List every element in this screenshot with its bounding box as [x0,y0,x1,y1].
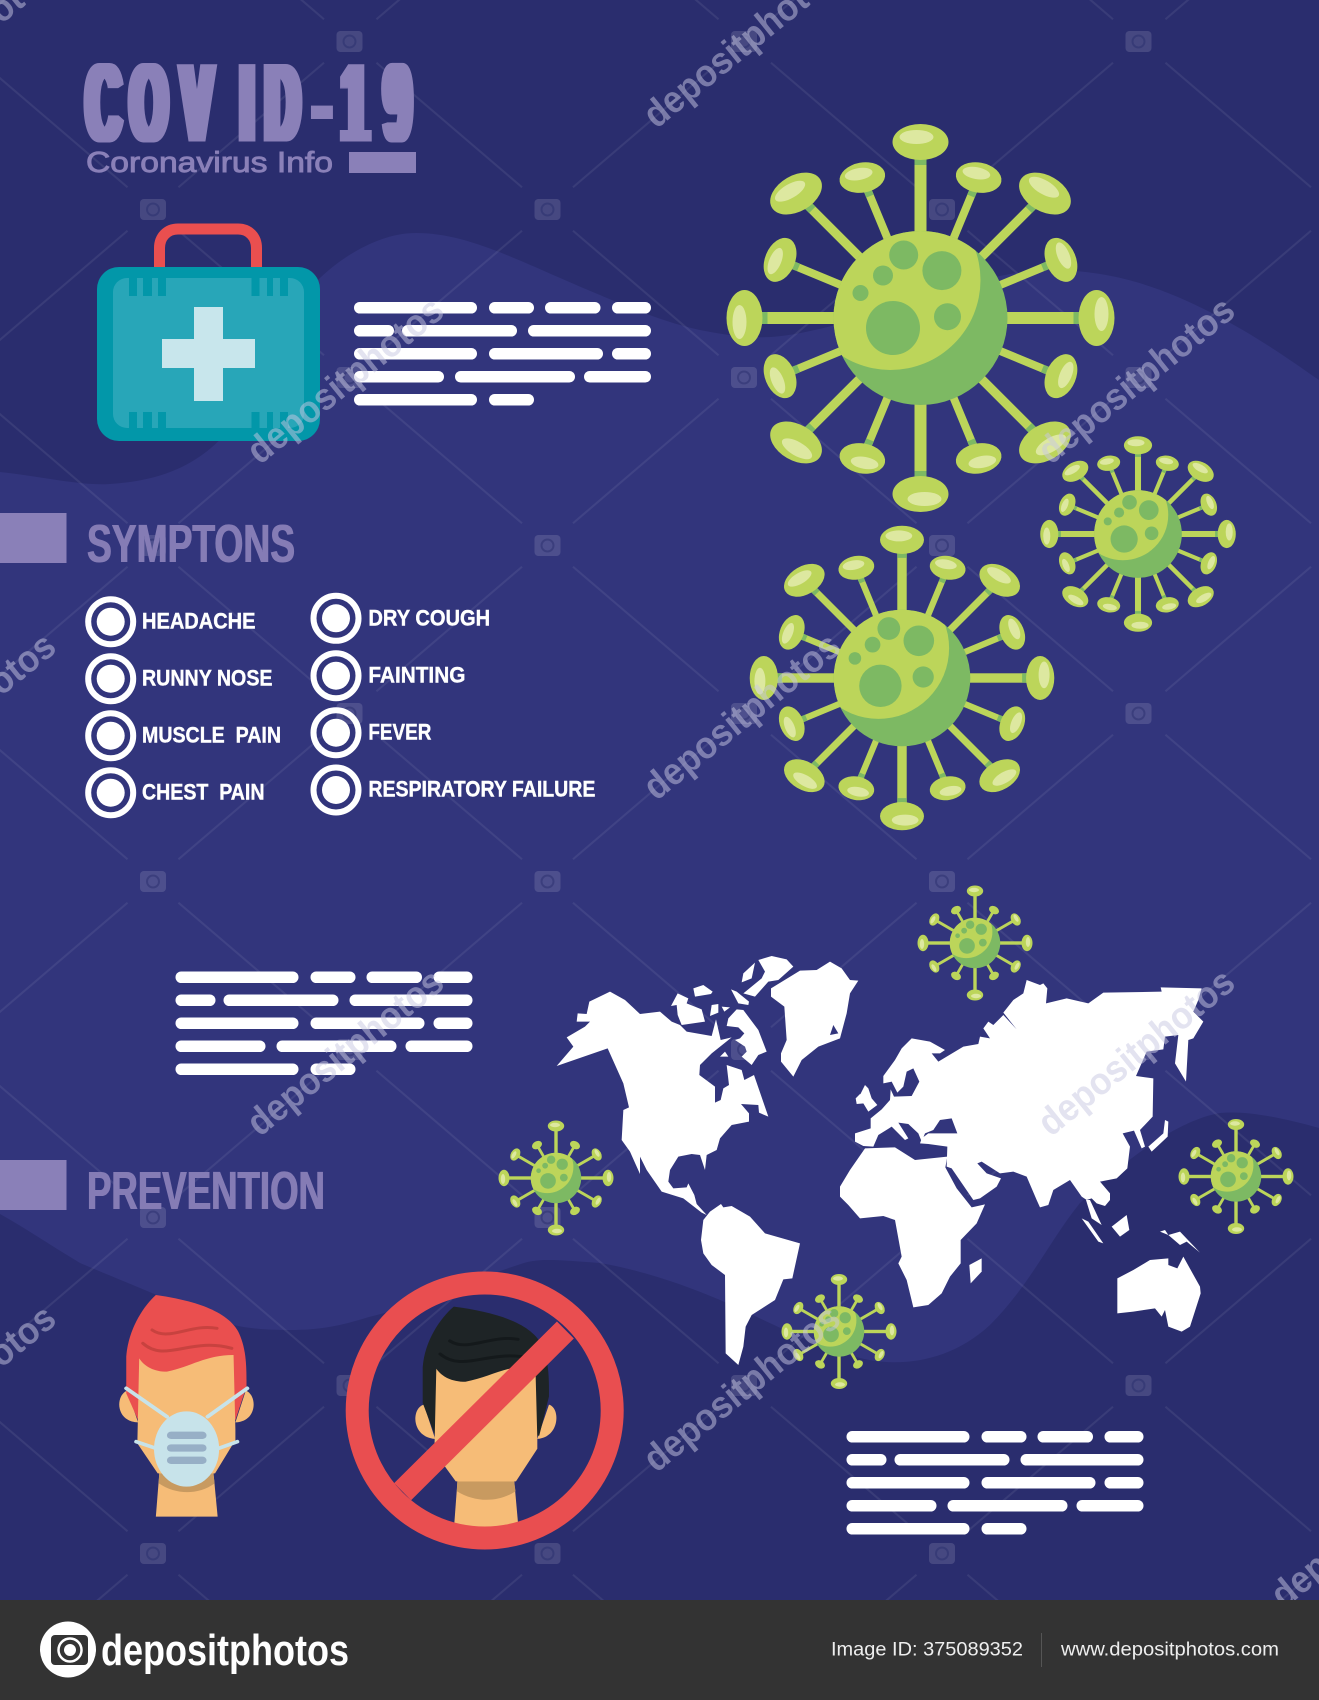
text placeholder lines: bottom [846,1431,1144,1534]
symptom: headache [88,599,256,644]
icon: man wearing mask [119,1295,254,1517]
image id: Image ID: 375089352 [831,1638,1023,1660]
subtitle: Coronavirus Info: Coronavirus Info [86,147,333,179]
virus: medium [750,526,1054,830]
symptom: chest pain: CHEST PAIN [142,780,264,805]
heading: SYMPTONS: SYMPTONS [87,514,295,574]
text placeholder lines: middle [176,972,472,1075]
symptom: muscle pain: MUSCLE PAIN [142,723,281,748]
mini virus: left of map [498,1120,614,1236]
mini virus: top of map [918,886,1032,1000]
symptom: fever: FEVER [368,720,432,745]
heading: PREVENTION: PREVENTION [87,1161,325,1221]
map: americas and greenland [557,956,858,1365]
symptom: muscle pain [88,713,281,758]
watermarks: depositphotos [635,625,848,809]
unmasked head [415,1307,556,1530]
footer brand name: depositphotos [101,1626,349,1675]
mini virus: right of map [1178,1119,1294,1234]
watermarks: depositphotos [239,289,452,473]
symptom: fainting: FAINTING [368,663,465,688]
symptoms list [88,596,595,815]
footer divider [1041,1633,1042,1667]
virus: small [1040,436,1236,632]
symptom: dry cough: DRY COUGH [368,605,490,630]
watermarks: depositphotos [1030,289,1243,473]
footer bar [0,1600,1319,1700]
symptom: runny nose: RUNNY NOSE [142,665,272,690]
symptom: dry cough [314,596,490,641]
prohibition sign [357,1283,612,1538]
title: COVID-19: COVID-19 [87,41,411,166]
map: eurasia, africa and oceania [840,980,1203,1332]
icon: footer camera logo [40,1622,96,1678]
symptom: respiratory failure: RESPIRATORY FAILURE [368,777,595,802]
virus: large [726,124,1114,512]
symptom: runny nose [88,656,272,701]
section marker: symptons [0,513,66,563]
watermarks: depositphotos [239,961,452,1145]
symptom: chest pain [88,770,264,815]
symptom: fainting [314,653,465,698]
watermarks: depositphotos [1030,961,1243,1145]
symptom: fever [314,710,432,755]
text placeholder lines: top [354,302,651,406]
watermarks: depositphotos [635,1297,848,1481]
title accent bar [349,152,416,173]
icon: prohibited unmasked man [357,1283,612,1538]
section marker: prevention [0,1160,66,1210]
mini virus: bottom of map [782,1274,896,1389]
footer url: www.depositphotos.com [1060,1638,1279,1660]
icon: first aid kit [97,229,320,441]
world map [557,956,1203,1365]
symptom: respiratory failure [314,768,595,812]
symptom: headache: HEADACHE [142,608,256,633]
